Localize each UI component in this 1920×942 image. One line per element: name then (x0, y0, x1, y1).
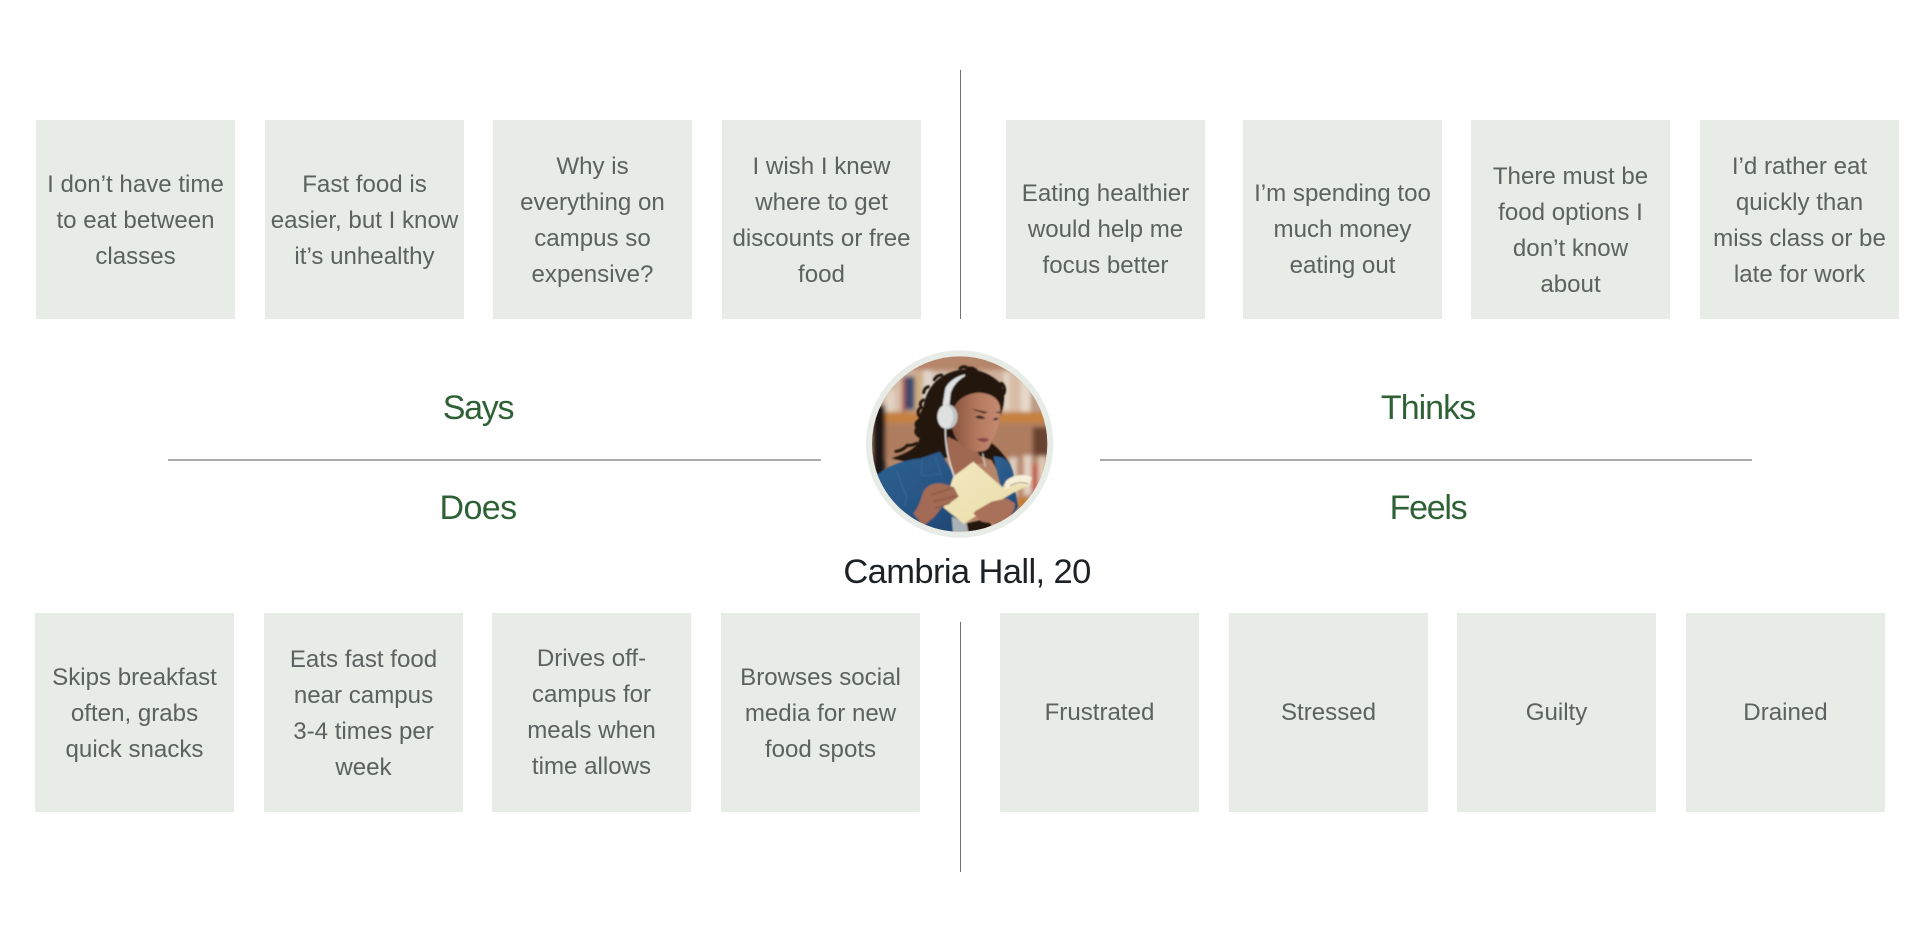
mouth (977, 438, 989, 442)
card: thinks 3 (1471, 120, 1670, 319)
hair over forehead (954, 381, 1003, 404)
panel: thinks cards (1006, 120, 1899, 319)
card: does 4: media for new (745, 700, 896, 727)
card: does 2: 3-4 times per (293, 718, 434, 745)
card: says 2: easier, but I know (271, 207, 458, 234)
card: does 3: campus for (532, 681, 651, 708)
denim jacket (878, 450, 958, 532)
card: says 4: discounts or free (732, 225, 911, 252)
card: thinks 2: eating out (1290, 252, 1395, 278)
card: feels 2 (1229, 613, 1428, 812)
headphone cup (944, 404, 959, 430)
card: does 3 (492, 613, 691, 812)
card: says 1: I don’t have time (47, 171, 224, 198)
card: feels 4 (1686, 613, 1885, 812)
card: says 2 (265, 120, 464, 319)
card: thinks 1: would help me (1028, 216, 1183, 242)
divider: bottom vertical line (960, 622, 961, 872)
neck (947, 437, 983, 475)
card: thinks 3: about (1540, 271, 1601, 298)
right hand (973, 498, 1015, 524)
card: thinks 4: miss class or be (1713, 225, 1886, 252)
card: does 2: Eats fast food (290, 646, 437, 673)
person name: Cambria Hall, 20 (843, 553, 1091, 591)
card: thinks 4: I’d rather eat (1732, 153, 1867, 180)
divider: right horizontal rule (1100, 459, 1752, 461)
card: does 3: time allows (532, 753, 651, 780)
panel: feels cards (1000, 613, 1885, 812)
card: feels 4: Drained (1743, 699, 1828, 726)
card: does 1: often, grabs (71, 700, 198, 727)
background wall (872, 356, 1048, 532)
card: feels 3 (1457, 613, 1656, 812)
card: does 2 (264, 613, 463, 812)
card: thinks 2: I’m spending too (1254, 180, 1431, 206)
card: says 3: campus so (534, 225, 651, 252)
heading: Thinks: Thinks (1381, 389, 1475, 427)
card: thinks 2: much money (1274, 216, 1411, 242)
card: says 3: everything on (520, 189, 665, 216)
card: thinks 1 (1006, 120, 1205, 319)
card: says 1: classes (95, 243, 176, 270)
card: does 1 (35, 613, 234, 812)
card: says 1: to eat between (56, 207, 215, 234)
card: says 3: Why is (556, 153, 629, 180)
card: says 4: I wish I knew (753, 153, 890, 180)
card: feels 1: Frustrated (1045, 698, 1154, 726)
blurred books and shelves (873, 370, 1049, 507)
card: says 1 (36, 120, 235, 319)
card: thinks 1: focus better (1043, 252, 1168, 278)
card: says 2: Fast food is (302, 171, 427, 198)
card: thinks 3: There must be (1493, 163, 1648, 190)
card: does 4: food spots (765, 736, 876, 763)
card: feels 3: Guilty (1526, 698, 1587, 726)
card: says 4 (722, 120, 921, 319)
card: does 1: Skips breakfast (52, 664, 217, 691)
card: says 4: food (798, 261, 845, 288)
shirt bottom (950, 516, 969, 532)
headphone band (943, 374, 965, 406)
card: thinks 4: quickly than (1736, 189, 1863, 216)
card: does 2: near campus (294, 682, 433, 709)
divider: left horizontal rule (168, 459, 821, 461)
card: does 2: week (335, 754, 392, 781)
card: thinks 4: late for work (1734, 261, 1865, 288)
card: thinks 1: Eating healthier (1022, 180, 1189, 206)
ring (866, 350, 1053, 538)
card: thinks 2 (1243, 120, 1442, 319)
hair curls (894, 364, 1008, 454)
face (951, 393, 1000, 452)
card: feels 2: Stressed (1281, 698, 1376, 726)
book (943, 462, 1032, 524)
card: does 1: quick snacks (66, 736, 203, 763)
heading: Says: Says (443, 389, 513, 427)
heading: Does: Does (440, 489, 516, 527)
hair (892, 369, 1011, 478)
portrait: student reading with headphones (866, 350, 1054, 538)
card: does 3: meals when (527, 717, 656, 744)
heading: Feels: Feels (1390, 489, 1466, 527)
card: feels 1 (1000, 613, 1199, 812)
panel: does cards (35, 613, 920, 812)
card: says 3 (493, 120, 692, 319)
card: does 3: Drives off- (537, 645, 646, 672)
divider: top vertical line (960, 70, 961, 319)
cable (945, 429, 954, 477)
card: thinks 3: food options I (1498, 199, 1643, 226)
card: says 4: where to get (755, 189, 888, 216)
card: thinks 4 (1700, 120, 1899, 319)
card: thinks 3: don’t know (1513, 235, 1628, 262)
card: does 4: Browses social (740, 664, 901, 691)
card: does 4 (721, 613, 920, 812)
card: says 3: expensive? (532, 261, 653, 288)
left hand (913, 483, 959, 526)
panel: says cards (36, 120, 921, 319)
card: says 2: it’s unhealthy (294, 243, 435, 270)
brows and eyes (973, 409, 988, 413)
